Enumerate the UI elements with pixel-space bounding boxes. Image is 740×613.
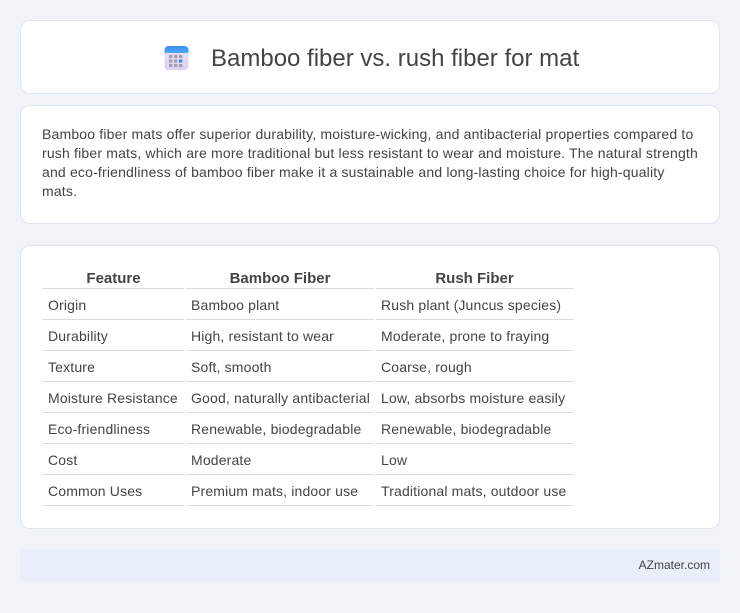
row: Eco-friendliness: [48, 421, 551, 437]
row: Common Uses: [48, 483, 566, 499]
panel: comparison table: [20, 245, 720, 529]
row: Common Uses: Common Uses: [48, 483, 142, 499]
row: Durability: Durability: [48, 328, 108, 344]
text block: [42, 126, 698, 199]
row: Texture: Coarse, rough: [381, 359, 472, 375]
row: Common Uses: Premium mats, indoor use: [191, 483, 358, 499]
panel: title: [20, 20, 720, 94]
row: Eco-friendliness: Renewable, biodegradable: [381, 421, 551, 437]
row: Cost: [48, 452, 407, 468]
row: Moisture Resistance: Good, naturally antibacterial: [191, 390, 370, 406]
row: Texture: Soft, smooth: [191, 359, 272, 375]
row: Cost: Cost: [48, 452, 77, 468]
heading: Bamboo fiber vs. rush fiber for mat: [211, 45, 579, 72]
row: Eco-friendliness: Renewable, biodegradable: [191, 421, 361, 437]
text block: mats.: [42, 183, 77, 199]
row: Origin: Rush plant (Juncus species): [381, 297, 561, 313]
row: Cost: Low: [381, 452, 407, 468]
row: Eco-friendliness: Eco-friendliness: [48, 421, 150, 437]
row: Origin: [48, 297, 561, 313]
table header: Feature: [86, 270, 141, 287]
text block: and eco-friendliness of bamboo fiber make it a sustainable and long-lasting choice for high-quality: [42, 164, 665, 180]
table header: [86, 270, 514, 287]
row: Origin: Origin: [48, 297, 86, 313]
row: Moisture Resistance: Moisture Resistance: [48, 390, 178, 406]
text block: Bamboo fiber mats offer superior durability, moisture-wicking, and antibacterial properties compared to: [42, 126, 693, 142]
row: Cost: Moderate: [191, 452, 251, 468]
row: Origin: Bamboo plant: [191, 297, 279, 313]
row: Durability: High, resistant to wear: [191, 328, 334, 344]
footer bar: [20, 549, 720, 582]
row: Durability: [48, 328, 549, 344]
table: [43, 270, 573, 506]
panel: intro text: [20, 105, 720, 224]
text block: rush fiber mats, which are more traditional but less resistant to wear and moisture. The natural strength: [42, 145, 698, 161]
footer credit: AZmater.com: [639, 558, 710, 572]
row: Texture: Texture: [48, 359, 95, 375]
row: Moisture Resistance: Low, absorbs moisture easily: [381, 390, 565, 406]
row: Durability: Moderate, prone to fraying: [381, 328, 549, 344]
row: Moisture Resistance: [48, 390, 566, 406]
table header: Rush Fiber: [435, 270, 514, 287]
row: Texture: [48, 359, 472, 375]
row: Common Uses: Traditional mats, outdoor use: [381, 483, 566, 499]
table header: Bamboo Fiber: [230, 270, 330, 287]
icon: calendar: [164, 46, 188, 70]
